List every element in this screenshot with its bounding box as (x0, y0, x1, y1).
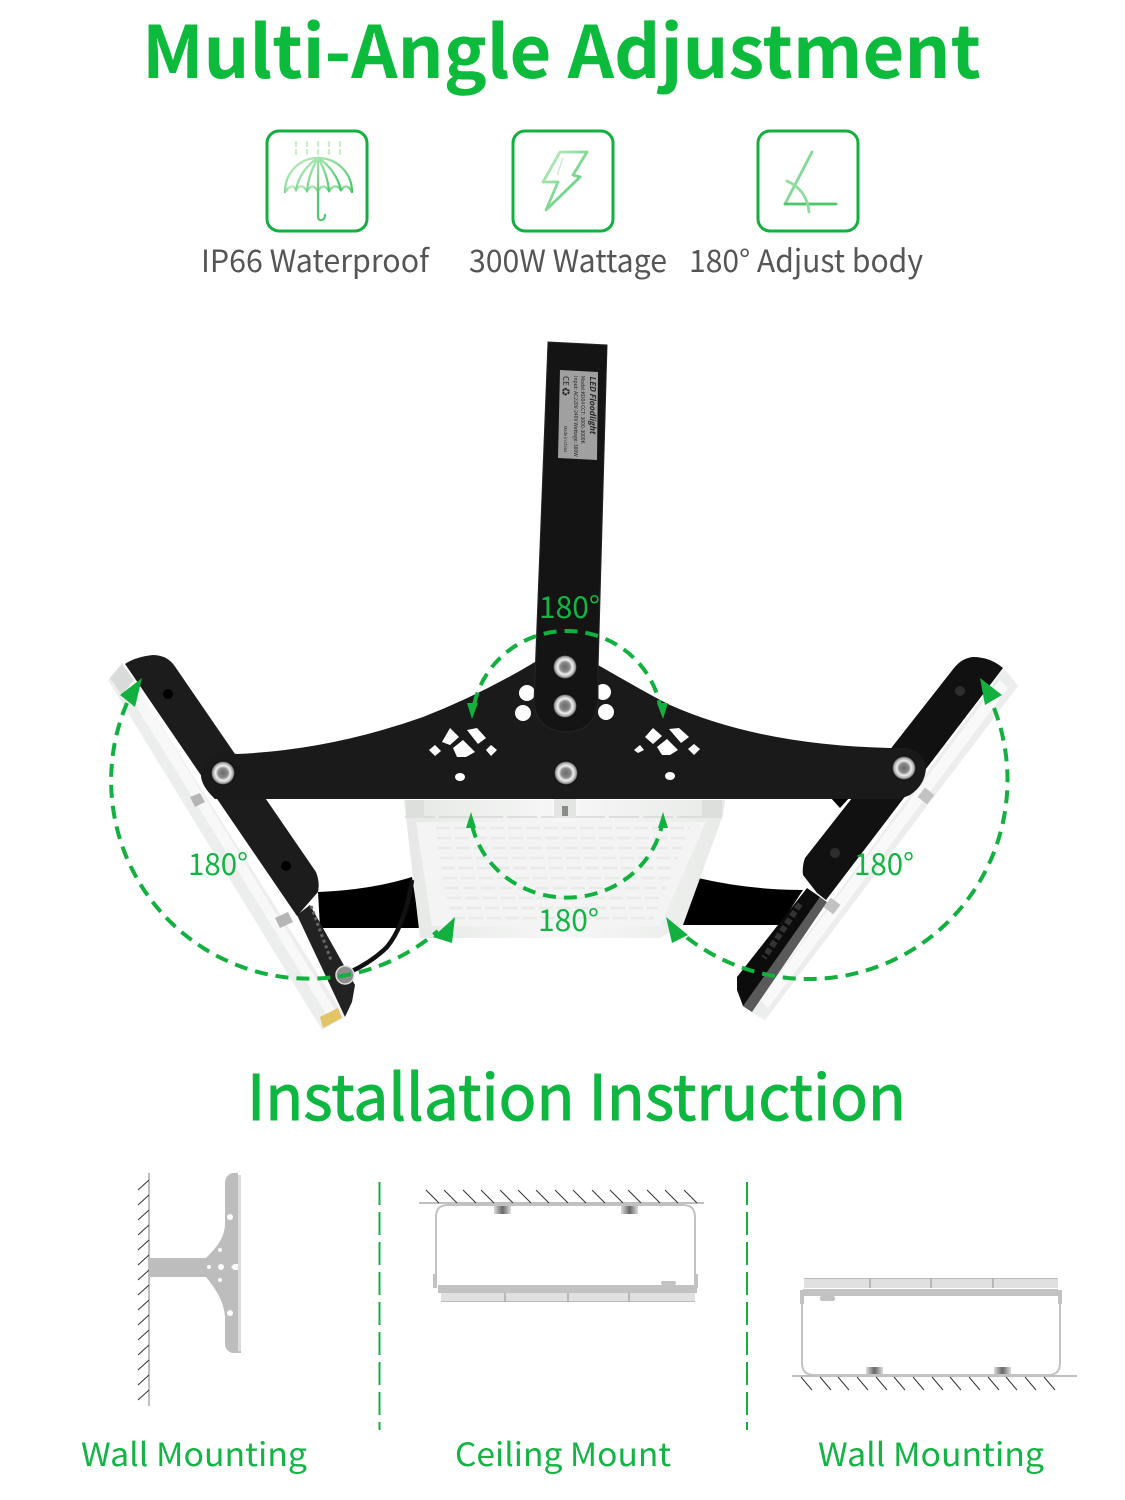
label: 300W Wattage (469, 236, 667, 281)
rear bracket bands (318, 797, 850, 928)
rating label: LED Floodlight (587, 376, 598, 435)
angle labels: 180° (854, 840, 914, 884)
label: 180° Adjust body (689, 236, 923, 281)
arrow: centre arc (466, 812, 668, 898)
heading: Installation Instruction: Installation Instruction (247, 1048, 906, 1139)
rating label (558, 370, 598, 460)
right mounting plate (803, 657, 1003, 900)
mounting labels: Wall Mounting (818, 1430, 1044, 1476)
rating label: Model:KD04 CCT: 3000-3000K (579, 376, 586, 445)
angle labels: 180° (539, 583, 600, 627)
divider (746, 1182, 748, 1430)
diagram: wall mounting floor view (792, 1278, 1077, 1390)
vertical arm (534, 342, 607, 732)
mounting labels: Ceiling Mount (455, 1430, 671, 1476)
crossbar cut-outs (429, 684, 700, 781)
arrow: right arc (666, 678, 1008, 979)
centre light head (404, 798, 725, 938)
rating label: CE ♻ (560, 376, 571, 396)
cable (350, 880, 412, 972)
icon: angle (758, 131, 858, 231)
arrow: top arc (467, 631, 668, 719)
product photo: floodlight with three heads (108, 342, 1018, 1030)
feature: 180° Adjust body (689, 131, 923, 281)
pivot bolts (211, 655, 916, 785)
left light head (108, 655, 355, 1030)
arrow: left arc (111, 678, 455, 979)
left mounting plate (125, 655, 319, 916)
angle labels: 180° (188, 840, 248, 884)
rating label: Input: AC220V-240V Wattage: 300W (572, 376, 579, 457)
angle labels: 180° (538, 896, 599, 940)
divider (378, 1182, 380, 1430)
rotation arrows (111, 631, 1008, 979)
label: IP66 Waterproof (201, 236, 431, 281)
icon: lightning bolt (513, 131, 613, 231)
diagram: ceiling mount (419, 1190, 704, 1302)
feature: IP66 Waterproof (201, 131, 431, 281)
crossbar (201, 662, 926, 799)
mounting labels: Wall Mounting (81, 1430, 307, 1476)
diagram: wall mounting side view (138, 1173, 241, 1406)
right light head (737, 657, 1018, 1020)
angle labels (188, 583, 914, 940)
rating label: Made in China (562, 426, 568, 452)
mounting labels (81, 1430, 1044, 1476)
icon: umbrella with rain (267, 131, 367, 231)
feature: 300W Wattage (469, 131, 667, 281)
